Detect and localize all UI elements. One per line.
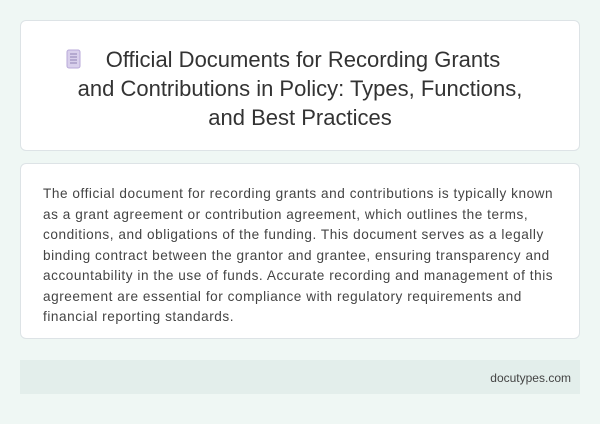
text block	[43, 186, 553, 324]
text block: binding contract between the grantor and grantee, ensuring transparency and	[43, 248, 550, 262]
heading: and Contributions in Policy: Types, Functions,	[78, 76, 522, 101]
text block: financial reporting standards.	[43, 309, 234, 324]
footer	[20, 360, 580, 394]
icon: document	[66, 50, 80, 68]
text block: accountability in the use of funds. Accurate recording and management of this	[43, 268, 553, 283]
text block: The official document for recording grants and contributions is typically known	[43, 186, 553, 201]
text block: conditions, and obligations of the funding. This document serves as a legally	[43, 227, 544, 242]
panel: title card	[20, 20, 580, 151]
heading: Official Documents for Recording Grants	[106, 47, 500, 72]
panel: description	[20, 163, 580, 339]
footer: docutypes.com	[490, 371, 571, 385]
heading: and Best Practices	[208, 105, 392, 130]
heading	[66, 47, 522, 130]
text block: agreement are essential for compliance with regulatory requirements and	[43, 288, 522, 304]
text block: as a grant agreement or contribution agreement, which outlines the terms,	[43, 206, 528, 222]
